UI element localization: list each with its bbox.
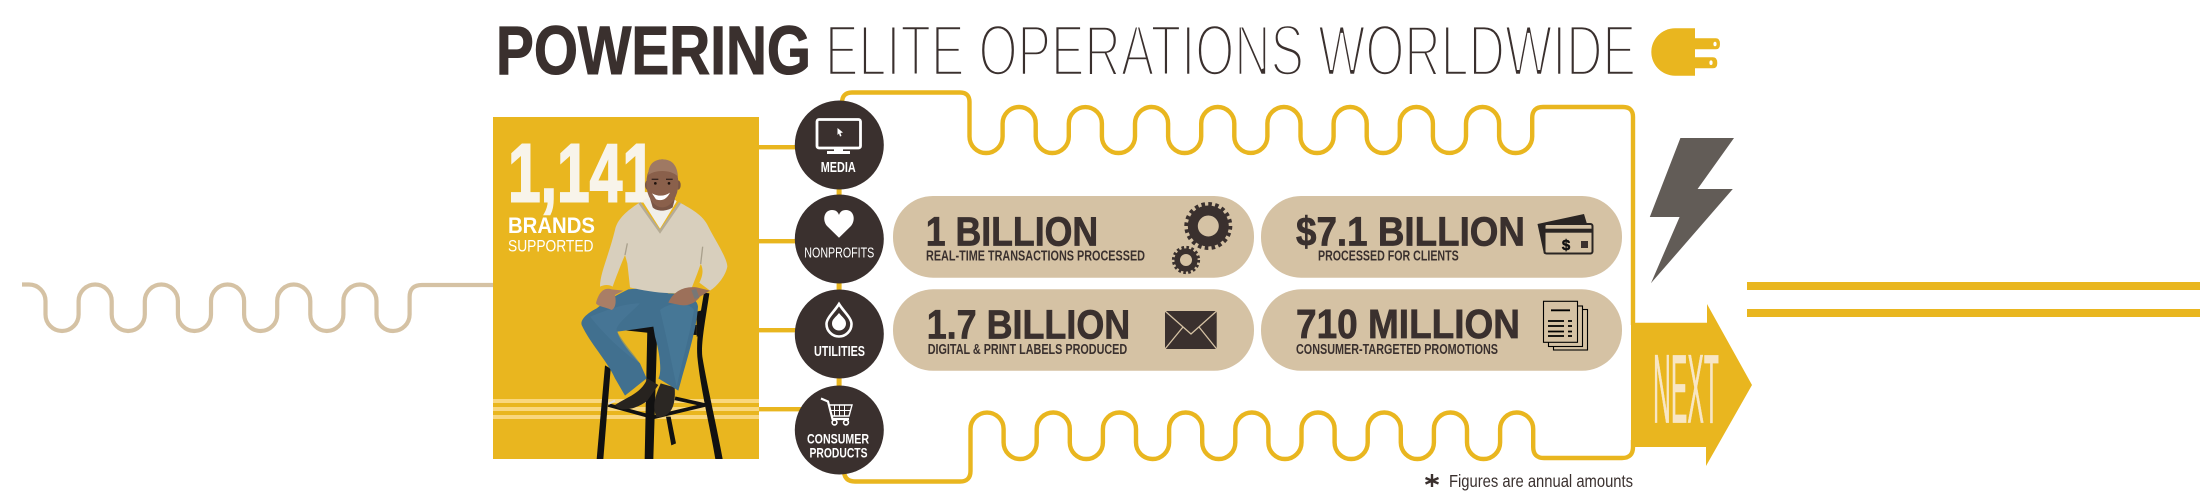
icon: envelope — [1165, 311, 1217, 349]
neck and undershirt — [643, 195, 677, 229]
value: 710 MILLION — [1296, 301, 1520, 347]
output lines — [1747, 282, 2200, 317]
label: media: MEDIA — [821, 159, 856, 176]
hands — [596, 289, 623, 310]
stat pill: $7.1 billion processed — [1261, 196, 1622, 278]
icon: shopping cart — [821, 398, 852, 425]
icon: water drop — [826, 304, 852, 336]
label: consumer products — [807, 430, 869, 460]
caption: REAL-TIME TRANSACTIONS PROCESSED — [926, 249, 1145, 265]
icon: credit cards — [1538, 214, 1592, 254]
category: consumer products — [795, 386, 884, 474]
label: consumer products: CONSUMER — [807, 430, 869, 446]
value: 1 BILLION — [926, 209, 1098, 255]
label: brands: BRANDS — [508, 213, 595, 238]
label: utilities: UTILITIES — [814, 343, 865, 360]
category: media — [795, 100, 884, 190]
title: ELITE OPERATIONS WORLDWIDE — [825, 10, 1636, 92]
icon: credit cards: $ — [1562, 237, 1571, 254]
label: supported: SUPPORTED — [508, 237, 594, 256]
title — [496, 10, 1636, 92]
top yellow wire — [842, 92, 1633, 325]
label: consumer products: PRODUCTS — [810, 444, 868, 460]
value: $7.1 BILLION — [1296, 208, 1525, 254]
left input wire — [22, 284, 495, 331]
label: nonprofits: NONPROFITS — [804, 244, 874, 261]
caption: DIGITAL & PRINT LABELS PRODUCED — [928, 342, 1127, 358]
icon: heart — [824, 210, 854, 238]
panel stripes — [493, 399, 759, 419]
head — [645, 180, 650, 190]
panel: brands supported — [493, 117, 759, 459]
connectors: panel to circles — [759, 145, 842, 411]
value: 1.7 BILLION — [927, 302, 1130, 348]
jeans — [581, 288, 698, 396]
title: POWERING — [496, 13, 811, 89]
caption: CONSUMER-TARGETED PROMOTIONS — [1296, 342, 1498, 358]
stat pill: 710 million promotions — [1261, 289, 1622, 371]
sweater — [600, 203, 727, 293]
arrow: next — [1631, 304, 1752, 466]
text: NEXT — [1653, 335, 1719, 444]
photo: smiling man on stool — [581, 159, 727, 459]
icon: plug — [1651, 28, 1720, 76]
category: utilities — [795, 290, 884, 378]
icon: gears — [1173, 204, 1230, 273]
icon: lightning bolt — [1650, 138, 1734, 283]
stat pill: 1.7 billion labels — [893, 289, 1254, 371]
icon: documents — [1544, 301, 1588, 350]
caption: PROCESSED FOR CLIENTS — [1318, 249, 1459, 265]
footnote: Figures are annual amounts — [1449, 471, 1633, 491]
bottom yellow wire — [844, 412, 1633, 482]
stat: 1,141 brands: 1,141 — [508, 127, 655, 220]
stat pill: 1 billion transactions — [893, 196, 1254, 278]
category: nonprofits — [795, 194, 884, 284]
shoes — [615, 378, 658, 409]
icon: monitor — [817, 120, 860, 154]
